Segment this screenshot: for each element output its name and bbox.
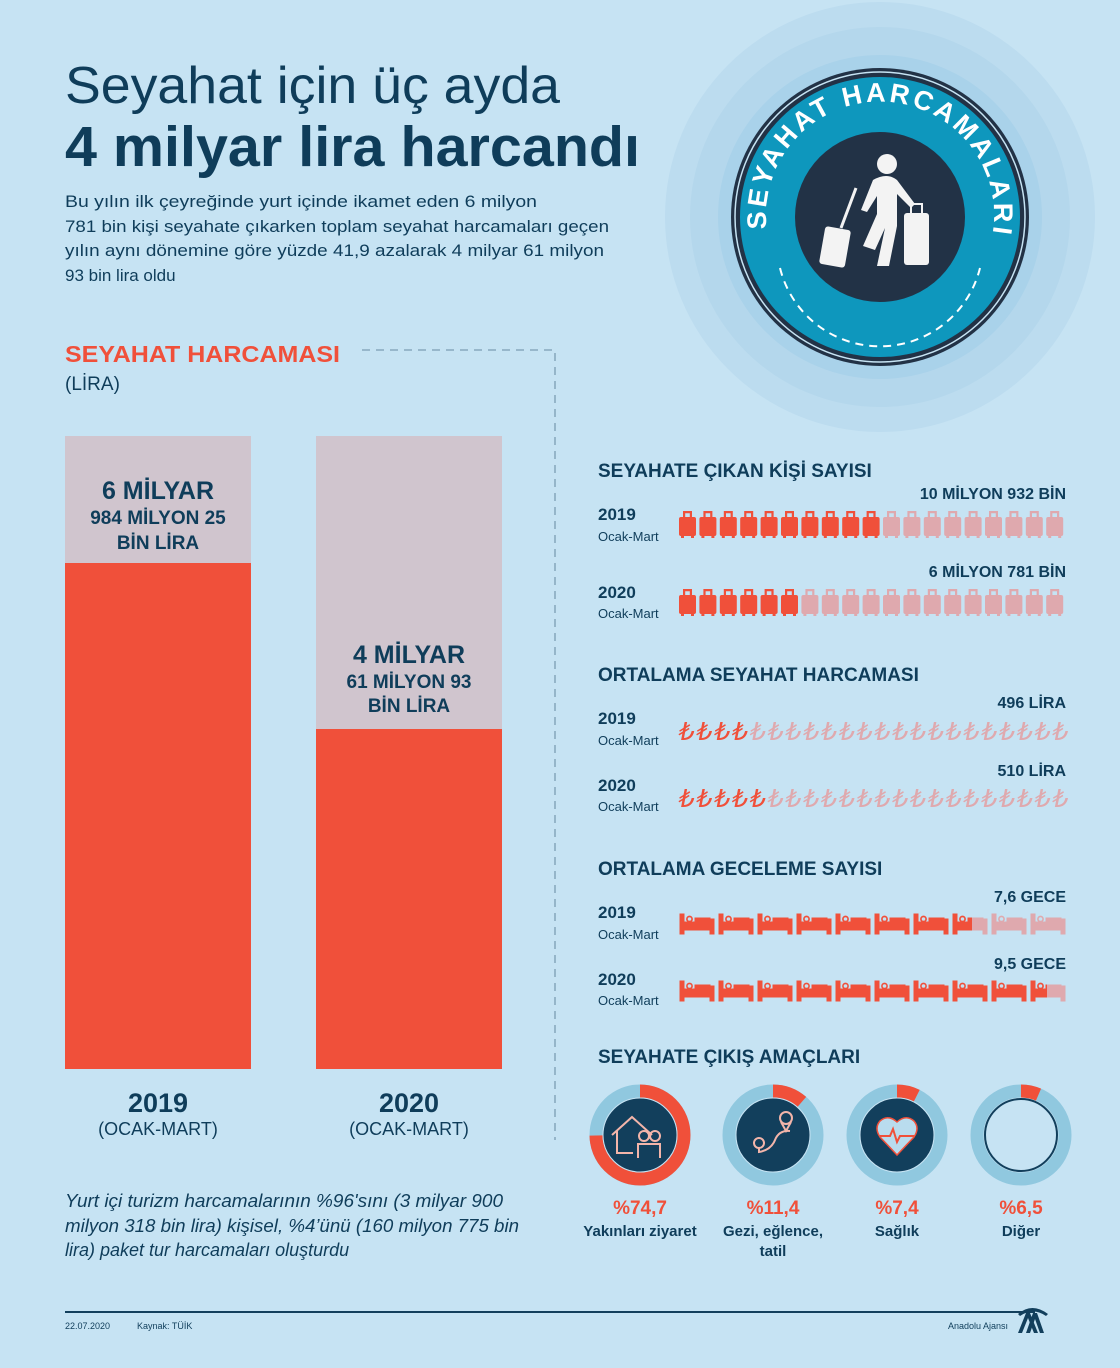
intro paragraph	[65, 192, 609, 285]
section: ortalama seyahat harcaması: 510 LİRA	[998, 762, 1066, 780]
section: ortalama seyahat harcaması: 2020	[598, 776, 636, 795]
section: ortalama geceleme sayısı: 2019	[598, 903, 636, 922]
section: seyahate çıkış amaçları: SEYAHATE ÇIKIŞ AMAÇLARI	[598, 1047, 860, 1068]
section: ortalama geceleme sayısı	[598, 859, 1066, 1008]
donut: gezi eğlence tatil: %11,4	[747, 1198, 800, 1219]
donut: diğer: Diğer	[1002, 1223, 1040, 1240]
section: seyahate çıkan kişi sayısı: 6 MİLYON 781 BİN	[929, 563, 1066, 581]
donut: gezi eğlence tatil: tatil	[760, 1243, 786, 1260]
bar chart: 2019: 6 MİLYAR	[102, 477, 214, 505]
bar chart: 2019: (OCAK-MART)	[98, 1119, 218, 1139]
bar chart: 2020	[316, 436, 502, 1139]
title: 4 milyar lira harcandı	[65, 115, 640, 179]
footer: Kaynak: TÜİK	[137, 1321, 192, 1331]
bar chart: 2020: (OCAK-MART)	[349, 1119, 469, 1139]
section: ortalama seyahat harcaması: ORTALAMA SEYAHAT HARCAMASI	[598, 665, 919, 686]
section: ortalama geceleme sayısı: Ocak-Mart	[598, 927, 659, 942]
intro paragraph: yılın aynı dönemine göre yüzde 41,9 azalarak 4 milyar 61 milyon	[65, 241, 604, 260]
badge: seyahat harcamaları	[665, 2, 1095, 432]
icon: traveler with suitcases	[819, 154, 929, 268]
icon row: beds 2020	[680, 981, 1065, 1001]
donut: yakınları ziyaret: Yakınları ziyaret	[583, 1223, 697, 1240]
icon row: lira 2019: ₺₺₺₺₺₺₺₺₺₺₺₺₺₺₺₺₺₺₺₺₺₺	[678, 717, 1069, 746]
bar chart: 2020: BİN LİRA	[368, 696, 450, 717]
donut: sağlık: Sağlık	[875, 1223, 920, 1240]
bar chart: 2019: 2019	[128, 1088, 188, 1118]
section: ortalama geceleme sayısı: 2020	[598, 970, 636, 989]
section: ortalama geceleme sayısı: 7,6 GECE	[994, 889, 1066, 906]
section: seyahate çıkan kişi sayısı: SEYAHATE ÇIKAN KİŞİ SAYISI	[598, 461, 872, 482]
intro paragraph: 93 bin lira oldu	[65, 266, 176, 285]
section: seyahate çıkan kişi sayısı: Ocak-Mart	[598, 606, 659, 621]
donut: yakınları ziyaret	[583, 1091, 697, 1240]
bar chart: 2019: 984 MİLYON 25	[90, 508, 226, 529]
bar chart: 2019: BİN LİRA	[117, 533, 199, 554]
heading: seyahat harcaması: SEYAHAT HARCAMASI	[65, 341, 340, 367]
section: ortalama geceleme sayısı: ORTALAMA GECELEME SAYISI	[598, 859, 882, 880]
section: ortalama seyahat harcaması: 2019	[598, 709, 636, 728]
section: ortalama seyahat harcaması	[598, 665, 1069, 814]
icon row: suitcases 2019	[679, 511, 1063, 538]
title	[65, 57, 640, 179]
section: seyahate çıkan kişi sayısı	[598, 461, 1066, 621]
donut: sağlık: %7,4	[875, 1198, 919, 1219]
section: ortalama seyahat harcaması: 496 LİRA	[998, 694, 1066, 712]
title: Seyahat için üç ayda	[65, 57, 560, 115]
section: seyahate çıkan kişi sayısı: Ocak-Mart	[598, 529, 659, 544]
note text	[65, 1191, 519, 1260]
donut: gezi eğlence tatil	[723, 1091, 823, 1260]
section: ortalama geceleme sayısı: 9,5 GECE	[994, 956, 1066, 973]
bar chart: 2020: 61 MİLYON 93	[347, 672, 471, 693]
section: ortalama seyahat harcaması: Ocak-Mart	[598, 733, 659, 748]
donut: gezi eğlence tatil: Gezi, eğlence,	[723, 1223, 823, 1240]
icon row: suitcases 2020	[679, 589, 1063, 616]
footer: Anadolu Ajansı	[948, 1321, 1008, 1331]
bar chart: 2020: 2020	[379, 1088, 439, 1118]
note text: milyon 318 bin lira) kişisel, %4’ünü (160 milyon 775 bin	[65, 1216, 519, 1236]
section: seyahate çıkan kişi sayısı: 2019	[598, 505, 636, 524]
note text: Yurt içi turizm harcamalarının %96'sını (3 milyar 900	[65, 1191, 503, 1211]
badge: seyahat harcamaları: SEYAHAT HARCAMALARI	[747, 83, 1013, 234]
icon row: beds 2019	[680, 914, 1065, 934]
heading: seyahat harcaması: (LİRA)	[65, 374, 120, 395]
intro paragraph: 781 bin kişi seyahate çıkarken toplam seyahat harcamaları geçen	[65, 217, 609, 236]
intro paragraph: Bu yılın ilk çeyreğinde yurt içinde ikamet eden 6 milyon	[65, 192, 537, 211]
section: seyahate çıkış amaçları	[583, 1047, 1065, 1260]
footer: 22.07.2020	[65, 1321, 110, 1331]
donut: diğer: %6,5	[999, 1198, 1043, 1219]
section: seyahate çıkan kişi sayısı: 10 MİLYON 932 BİN	[920, 485, 1066, 503]
note text: lira) paket tur harcamaları oluşturdu	[65, 1240, 349, 1260]
icon row: lira 2020: ₺₺₺₺₺₺₺₺₺₺₺₺₺₺₺₺₺₺₺₺₺₺	[678, 784, 1069, 813]
logo: AA	[1018, 1308, 1048, 1333]
section: ortalama seyahat harcaması: Ocak-Mart	[598, 799, 659, 814]
section: ortalama geceleme sayısı: Ocak-Mart	[598, 993, 659, 1008]
donut: yakınları ziyaret: %74,7	[613, 1198, 667, 1219]
section: seyahate çıkan kişi sayısı: 2020	[598, 583, 636, 602]
donut: sağlık	[853, 1091, 941, 1240]
donut: diğer	[977, 1091, 1065, 1240]
bar chart: 2019	[65, 436, 251, 1139]
heading: seyahat harcaması	[65, 341, 340, 395]
footer	[65, 1308, 1048, 1333]
bar chart: 2020: 4 MİLYAR	[353, 641, 465, 669]
